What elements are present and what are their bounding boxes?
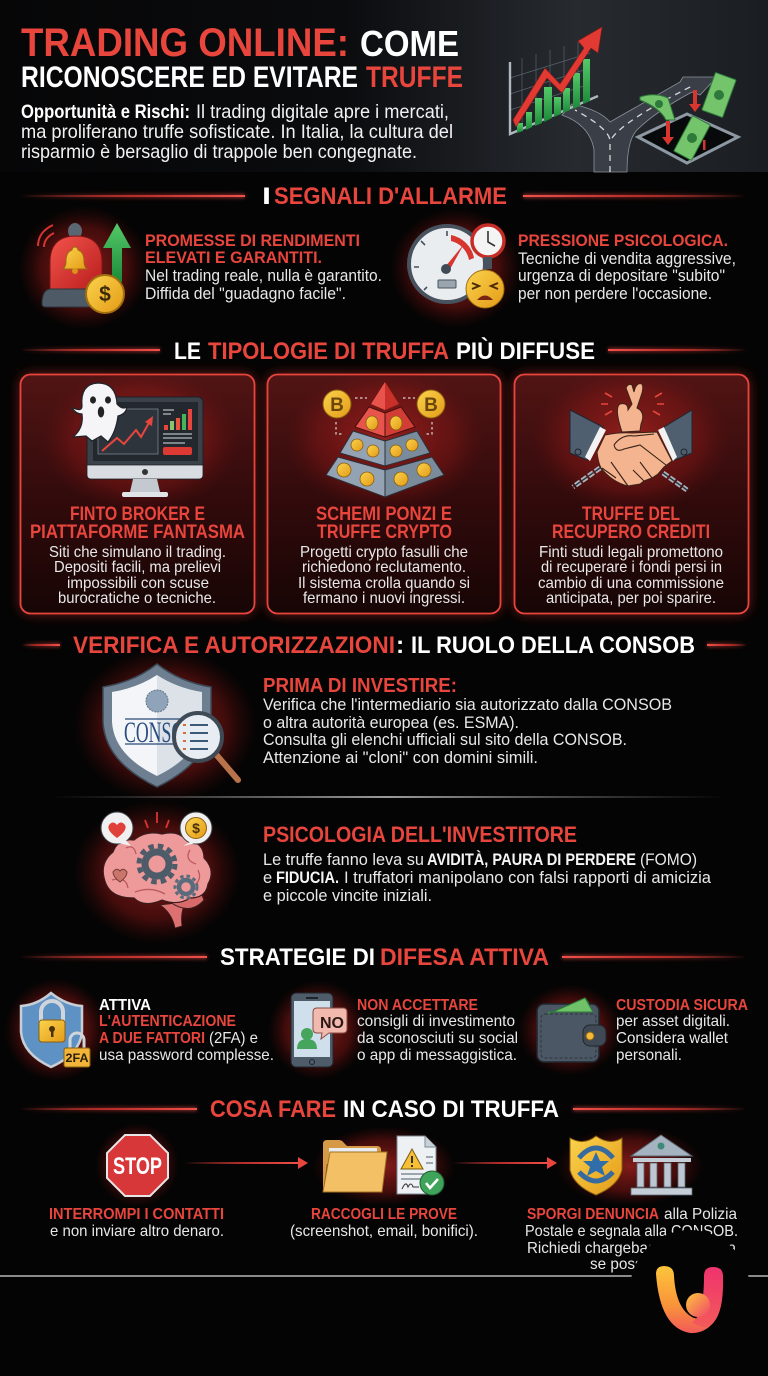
defence tip: non accettare: NON ACCETTARE xyxy=(357,997,478,1014)
card text: richiedono reclutamento. xyxy=(302,559,466,576)
arrow: step two to three xyxy=(453,1157,557,1169)
text: prima di investire: Verifica che l'intermediario sia autorizzato dalla CONSOB xyxy=(263,696,672,714)
text: psicologia dell'investitore: e piccole vincite iniziali. xyxy=(263,887,432,905)
icon: stop sign: STOP xyxy=(113,1153,162,1180)
section heading: strategie di difesa: DIFESA ATTIVA xyxy=(380,944,549,971)
alert: promesse di rendimenti: ELEVATI E GARANTITI. xyxy=(145,248,322,267)
defence tip: 2fa: usa password complesse. xyxy=(99,1047,274,1064)
defence tip: 2fa: (2FA) e xyxy=(209,1030,258,1047)
defence tip: 2fa: ATTIVA xyxy=(99,997,151,1014)
alert: pressione psicologica: PRESSIONE PSICOLOGICA. xyxy=(518,231,728,250)
alert: promesse di rendimenti xyxy=(145,231,382,303)
section heading: strategie di difesa xyxy=(20,944,747,971)
icon: brain with gears and speech bubbles xyxy=(73,800,241,944)
icon: brain with gears and speech bubbles: $ xyxy=(192,820,200,836)
icon: stop sign xyxy=(95,1123,179,1207)
defence tip: custodia sicura: CUSTODIA SICURA xyxy=(616,997,748,1014)
defence tip: 2fa: A DUE FATTORI xyxy=(99,1030,205,1047)
section heading: tipologie di truffa: TIPOLOGIE DI TRUFFA xyxy=(208,338,449,365)
text: prima di investire: o altra autorità europea (es. ESMA). xyxy=(263,714,519,732)
card text xyxy=(538,544,724,607)
alert: promesse di rendimenti: Diffida del "guadagno facile". xyxy=(145,285,346,303)
alert: pressione psicologica: per non perdere l'occasione. xyxy=(518,285,712,303)
icon: ghost on fake trading monitor xyxy=(72,383,203,497)
title xyxy=(21,21,463,94)
alert: promesse di rendimenti: PROMESSE DI RENDIMENTI xyxy=(145,231,360,250)
intro text: Il trading digitale apre i mercati, xyxy=(196,101,449,123)
card text: di recuperare i fondi persi in xyxy=(541,559,722,576)
card text: Depositi facili, ma prelievi xyxy=(54,559,221,576)
defence tip: non accettare: o app di messaggistica. xyxy=(357,1047,517,1064)
alert: promesse di rendimenti: Nel trading reale, nulla è garantito. xyxy=(145,267,382,285)
section heading: cosa fare xyxy=(20,1096,747,1123)
title: TRADING ONLINE: xyxy=(21,21,349,65)
section heading: i segnali d'allarme xyxy=(20,183,747,210)
card text xyxy=(298,544,470,607)
step text: sporgi denuncia: Postale e segnala alla CONSOB. xyxy=(525,1223,738,1240)
section heading: cosa fare: COSA FARE xyxy=(210,1096,336,1123)
text: psicologia dell'investitore: FIDUCIA. xyxy=(276,869,339,887)
alert: pressione psicologica xyxy=(518,231,736,303)
section heading: tipologie di truffa xyxy=(20,337,747,365)
icon: consob shield with magnifier xyxy=(73,647,257,803)
card text: fermano i nuovi ingressi. xyxy=(303,590,465,607)
text: prima di investire: Consulta gli elenchi ufficiali sul sito della CONSOB. xyxy=(263,731,627,749)
defence tip: non accettare: consigli di investimento xyxy=(357,1013,515,1030)
card text: Siti che simulano il trading. xyxy=(49,544,226,561)
arrow: step one to two xyxy=(184,1157,308,1169)
text: psicologia dell'investitore: AVIDITÀ, PAURA DI PERDERE xyxy=(427,850,636,869)
defence tip: non accettare: da sconosciuti su social xyxy=(357,1030,518,1047)
defence tip: 2fa xyxy=(99,997,274,1064)
card heading: TRUFFE CRYPTO xyxy=(317,522,452,543)
icon: wallet with banknote xyxy=(518,984,622,1076)
icon: folder and signed document xyxy=(312,1126,456,1206)
card text: impossibili con scuse xyxy=(67,575,209,592)
logo badge xyxy=(630,1230,750,1350)
card heading xyxy=(316,504,452,543)
card text: Il sistema crolla quando si xyxy=(298,575,470,592)
section heading: verifica e autorizzazioni: : xyxy=(396,632,404,659)
icon: ponzi pyramid with bitcoin coins xyxy=(323,382,445,497)
intro text: Opportunità e Rischi: xyxy=(21,101,190,123)
text: psicologia dell'investitore: PSICOLOGIA DELL'INVESTITORE xyxy=(263,822,577,847)
section heading: tipologie di truffa: PIÙ DIFFUSE xyxy=(456,337,595,365)
text: psicologia dell'investitore: I truffatori manipolano con falsi rapporti di amicizia xyxy=(344,869,712,887)
card heading: TRUFFE DEL xyxy=(582,504,680,525)
step text: sporgi denuncia xyxy=(525,1206,738,1273)
icon: alarm bell with coin and green arrow xyxy=(18,206,150,330)
section heading: verifica e autorizzazioni: VERIFICA E AUTORIZZAZIONI xyxy=(73,632,395,659)
icon: police badge and bank xyxy=(556,1126,704,1206)
step text: raccogli le prove: RACCOGLI LE PROVE xyxy=(311,1206,457,1223)
card text: Finti studi legali promettono xyxy=(539,544,723,561)
step text: sporgi denuncia: Richiedi chargeback alla banca xyxy=(527,1240,736,1257)
icon: handshake with crossed fingers and chains xyxy=(570,384,692,490)
defence tip: 2fa: L'AUTENTICAZIONE xyxy=(99,1013,236,1030)
section heading: tipologie di truffa: LE xyxy=(174,338,201,365)
title: RICONOSCERE ED EVITARE xyxy=(21,61,358,94)
card text xyxy=(49,544,226,607)
text: psicologia dell'investitore: Le truffe fanno leva su xyxy=(263,851,424,869)
card text: anticipata, per poi sparire. xyxy=(546,590,716,607)
icon: pressure gauge with clock and stressed face xyxy=(390,208,522,328)
alert: pressione psicologica: urgenza di depositare "subito" xyxy=(518,267,725,285)
title: TRUFFE xyxy=(366,61,463,94)
card text: Progetti crypto fasulli che xyxy=(300,544,468,561)
section heading: verifica e autorizzazioni xyxy=(22,632,747,659)
header panel xyxy=(0,0,768,172)
icon: shield with padlock and 2fa: 2FA xyxy=(66,1051,89,1065)
step text: sporgi denuncia: se possibile. xyxy=(590,1256,674,1273)
card text: cambio di una commissione xyxy=(538,575,724,592)
step text: raccogli le prove xyxy=(290,1206,478,1240)
step text: sporgi denuncia: SPORGI DENUNCIA xyxy=(527,1206,659,1223)
defence tip: custodia sicura: per asset digitali. xyxy=(616,1013,730,1030)
icon: consob shield with magnifier: CONSOB xyxy=(124,716,196,749)
defence tip: non accettare xyxy=(357,997,518,1064)
section heading: cosa fare: IN CASO DI TRUFFA xyxy=(343,1096,559,1123)
icon: shield with padlock and 2fa xyxy=(4,978,108,1082)
section heading: i segnali d'allarme: SEGNALI D'ALLARME xyxy=(274,183,507,210)
section heading: i segnali d'allarme: I xyxy=(262,183,271,210)
icon: alarm bell with coin and green arrow: $ xyxy=(99,283,111,306)
card heading xyxy=(30,504,245,543)
card heading: RECUPERO CREDITI xyxy=(552,522,710,543)
step text: sporgi denuncia: alla Polizia xyxy=(664,1206,737,1223)
panel: schemi ponzi xyxy=(267,368,501,614)
card text: burocratiche o tecniche. xyxy=(58,590,216,607)
icon: phone with no speech bubble xyxy=(268,980,368,1080)
text: prima di investire xyxy=(263,674,672,767)
defence tip: custodia sicura: personali. xyxy=(616,1047,682,1064)
icon: ponzi pyramid with bitcoin coins: B xyxy=(330,395,344,416)
step text: interrompi i contatti xyxy=(49,1206,224,1240)
text: prima di investire: Attenzione ai "cloni" con domini simili. xyxy=(263,749,538,767)
section heading: strategie di difesa: STRATEGIE DI xyxy=(220,944,375,971)
panel: finto broker xyxy=(20,368,255,614)
icon: phone with no speech bubble: NO xyxy=(320,1015,344,1032)
intro text: ma proliferano truffe sofisticate. In Italia, la cultura del xyxy=(21,121,453,143)
section heading: verifica e autorizzazioni: IL RUOLO DELLA CONSOB xyxy=(411,632,695,659)
defence tip: custodia sicura: Considera wallet xyxy=(616,1030,729,1047)
card heading: FINTO BROKER E xyxy=(70,504,205,525)
defence tip: custodia sicura xyxy=(616,997,748,1064)
card heading: PIATTAFORME FANTASMA xyxy=(30,522,245,543)
text: psicologia dell'investitore: (FOMO) xyxy=(640,851,697,869)
text: prima di investire: PRIMA DI INVESTIRE: xyxy=(263,674,457,697)
title: COME xyxy=(360,23,459,64)
icon: ponzi pyramid with bitcoin coins: B xyxy=(424,395,438,416)
text: psicologia dell'investitore xyxy=(263,822,712,905)
panel: truffe del recupero crediti xyxy=(514,368,749,614)
illustration: chart, forked road and money pit xyxy=(510,27,738,172)
intro text xyxy=(21,101,453,163)
step text: raccogli le prove: (screenshot, email, bonifici). xyxy=(290,1223,478,1240)
step text: interrompi i contatti: INTERROMPI I CONTATTI xyxy=(49,1206,224,1223)
step text: interrompi i contatti: e non inviare altro denaro. xyxy=(50,1223,224,1240)
text: psicologia dell'investitore: e xyxy=(263,869,272,887)
intro text: risparmio è bersaglio di trappole ben congegnate. xyxy=(21,141,417,163)
card heading xyxy=(552,504,710,543)
alert: pressione psicologica: Tecniche di vendita aggressive, xyxy=(518,250,736,268)
card heading: SCHEMI PONZI E xyxy=(316,504,452,525)
